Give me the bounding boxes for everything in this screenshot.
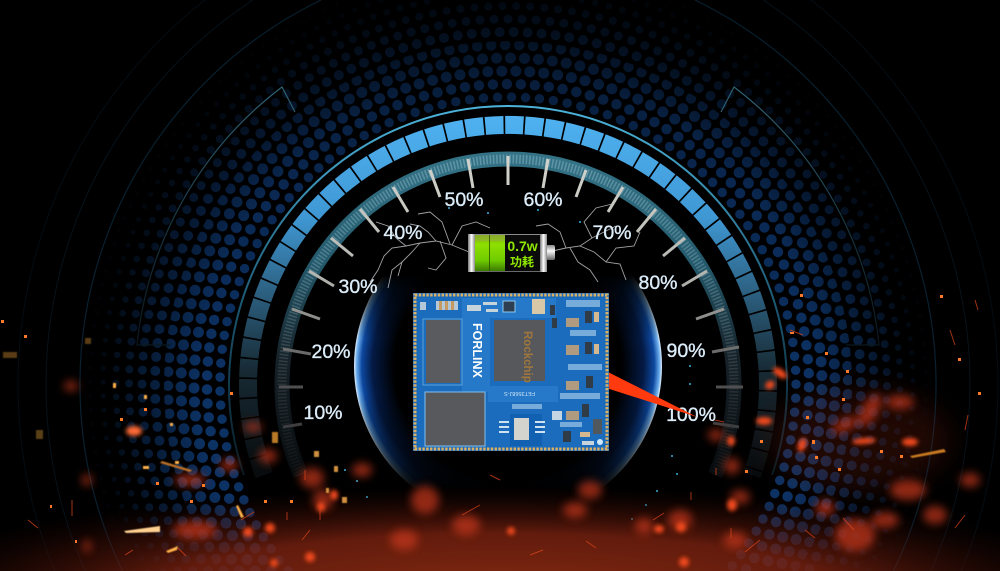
board base	[413, 293, 609, 451]
thin red spark streaks	[28, 300, 978, 556]
black gauge disc	[230, 107, 786, 571]
top components	[420, 299, 557, 328]
tick marks	[279, 156, 743, 427]
FORLINX logo: FORLINX	[470, 323, 484, 379]
needle	[600, 368, 697, 417]
gauge	[229, 106, 787, 571]
label 60%: 60%	[523, 189, 563, 211]
battery value: 0.7w	[507, 238, 538, 254]
corner bracket arc right	[721, 87, 879, 345]
processor chip	[494, 320, 545, 381]
battery body	[468, 234, 547, 272]
inner scale ring	[282, 159, 734, 475]
right side components	[499, 300, 603, 446]
label 50%: 50%	[444, 189, 484, 211]
label 70%: 70%	[592, 222, 632, 244]
battery terminal	[546, 245, 555, 260]
lightning	[370, 204, 640, 288]
label 90%: 90%	[666, 340, 706, 362]
label 100%: 100%	[666, 404, 716, 426]
pcb light patches	[462, 298, 558, 402]
label 30%: 30%	[338, 276, 378, 298]
percentage labels	[303, 189, 716, 426]
label 20%: 20%	[311, 341, 351, 363]
bright embers	[126, 365, 918, 567]
part number: FET3568J-S	[504, 390, 535, 396]
outer thin ring	[229, 106, 787, 475]
label 10%: 10%	[303, 402, 343, 424]
memory chip bottom	[425, 392, 485, 446]
planet glow	[354, 277, 662, 486]
fire glow	[0, 390, 1000, 571]
corner bracket arc left	[137, 87, 295, 345]
label 40%: 40%	[383, 222, 423, 244]
golden sparks	[3, 338, 946, 553]
battery caption: 功耗	[510, 254, 534, 269]
memory chip top	[423, 319, 462, 385]
label 80%: 80%	[638, 272, 678, 294]
battery charge level	[475, 235, 505, 271]
battery icon	[468, 234, 555, 272]
small orange specks	[1, 294, 981, 543]
Rockchip marking: Rockchip	[521, 331, 533, 383]
circuit board module	[413, 293, 609, 451]
segmented power arc	[248, 125, 768, 475]
blurred embers	[64, 381, 980, 552]
small cyan particles	[344, 207, 691, 520]
